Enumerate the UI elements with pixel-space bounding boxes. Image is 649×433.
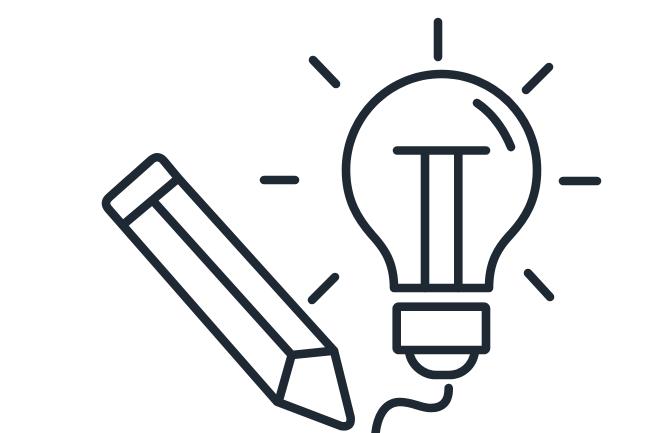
light rays <box>264 22 597 300</box>
pencil cap line <box>124 178 178 224</box>
bulb glass <box>346 74 537 288</box>
filament <box>397 150 486 288</box>
pencil centre line <box>155 203 292 355</box>
power cord <box>375 388 449 433</box>
bulb screw base <box>397 307 486 350</box>
pencil outline <box>106 157 351 426</box>
icon: pencil <box>106 157 351 426</box>
glass highlight <box>477 103 511 147</box>
icon: light bulb <box>346 74 537 433</box>
bulb base cap <box>409 351 475 375</box>
pencil ferrule <box>279 351 334 400</box>
